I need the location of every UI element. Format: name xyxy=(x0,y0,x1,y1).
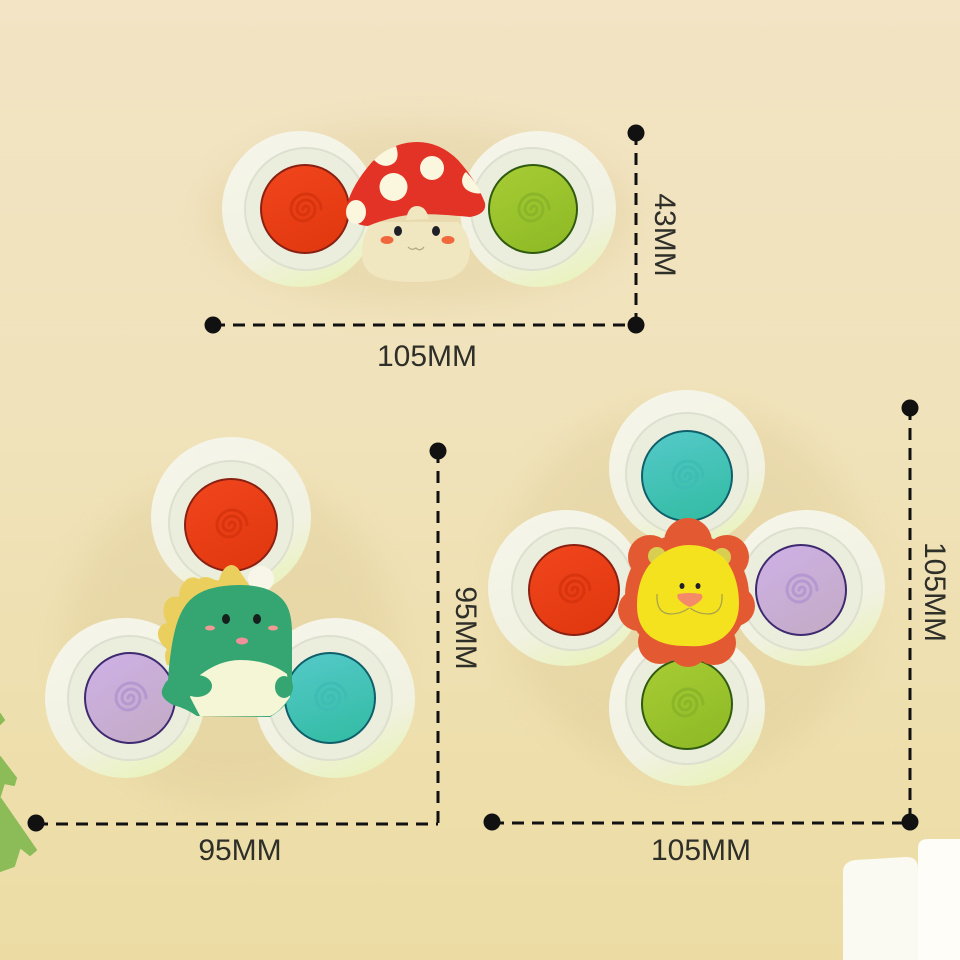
spinner: lion xyxy=(488,390,885,786)
dimensions: dinosaur spinner xyxy=(28,442,482,867)
spinner: dinosaur xyxy=(45,437,415,778)
label: height: 105MM xyxy=(918,542,951,642)
label: width: 105MM xyxy=(377,340,477,373)
top suction pad xyxy=(609,390,765,546)
label: height: 95MM xyxy=(449,586,482,670)
right suction pad xyxy=(255,618,415,778)
top suction pad xyxy=(151,437,311,597)
spinner: mushroom xyxy=(222,131,616,287)
hub xyxy=(622,525,752,655)
dinosaur character xyxy=(158,565,293,717)
left suction pad xyxy=(45,618,205,778)
icon: tree at left edge xyxy=(0,714,36,871)
hub xyxy=(177,585,287,695)
mushroom character xyxy=(346,142,485,282)
dimensions: lion spinner xyxy=(484,400,951,867)
label: width: 105MM xyxy=(651,834,751,867)
right suction pad xyxy=(460,131,616,287)
bottom suction pad xyxy=(609,630,765,786)
label: height: 43MM xyxy=(648,193,681,277)
label: width: 95MM xyxy=(198,834,282,867)
left suction pad xyxy=(488,510,644,666)
icon: white fence xyxy=(843,839,960,960)
dimensions: mushroom spinner xyxy=(204,124,681,373)
lion character xyxy=(618,518,755,667)
right suction pad xyxy=(729,510,885,666)
soft shadows behind spinners xyxy=(65,125,872,805)
left suction pad xyxy=(222,131,378,287)
